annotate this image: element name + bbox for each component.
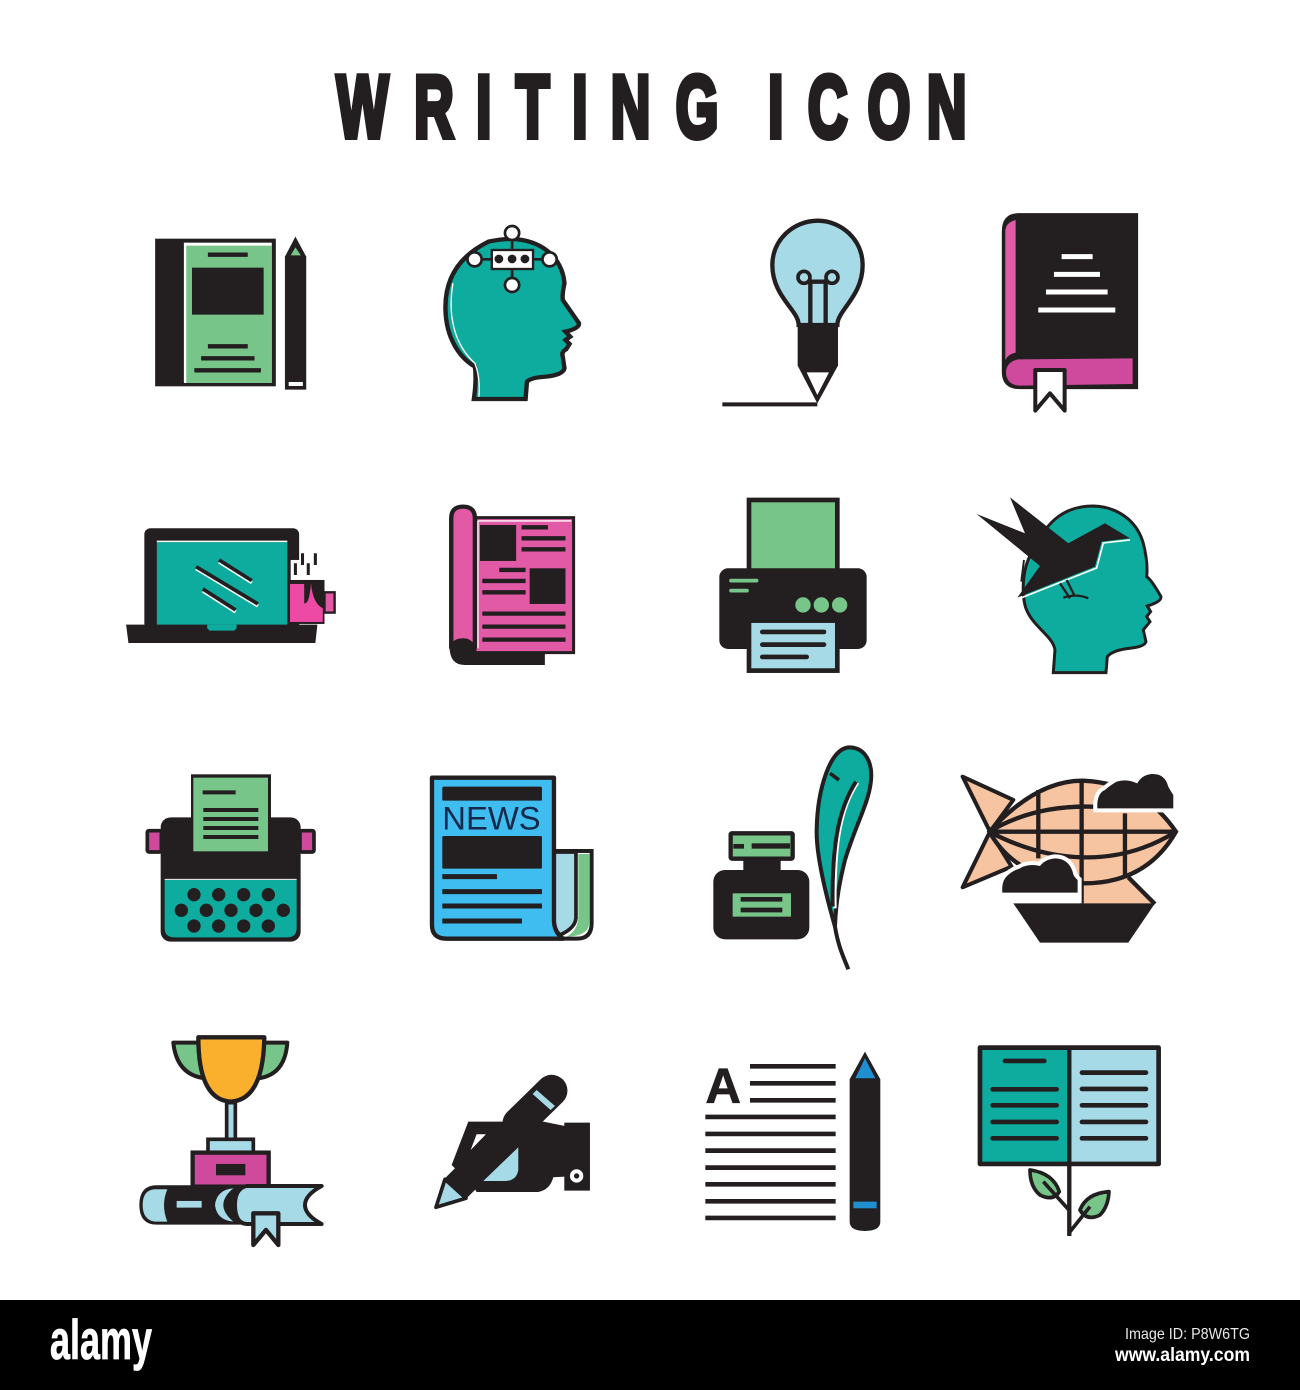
title: WRITING ICON	[337, 56, 967, 156]
icon: airship with clouds	[963, 774, 1176, 943]
icon: open book with plant	[980, 1048, 1159, 1236]
icon: notebook and pencil	[155, 237, 306, 390]
icon: hand writing with pen	[436, 1090, 590, 1207]
website: www.alamy.com	[1114, 1345, 1250, 1366]
icon: head with origami bird	[977, 497, 1161, 673]
icon: text document and pencil: A	[705, 1059, 741, 1114]
icon: trophy on books	[139, 1037, 322, 1245]
footer bar	[0, 1300, 1300, 1390]
footer logo: alamy	[50, 1308, 152, 1371]
icon: newspaper	[432, 778, 592, 939]
image id: Image ID: P8W6TG	[1125, 1326, 1250, 1343]
icon: typewriter	[147, 774, 314, 942]
icon: newspaper: NEWS	[442, 799, 541, 836]
icon: closed book with bookmark	[1003, 214, 1137, 411]
icon: light bulb pencil	[722, 221, 863, 404]
icon: inkwell and feather quill	[713, 747, 871, 969]
icon: printer	[719, 500, 867, 671]
icon: head with circuit diagram	[445, 226, 579, 399]
icon: text document and pencil	[705, 1052, 880, 1231]
icon: laptop and coffee mug	[126, 528, 335, 643]
icon: magazine scroll	[450, 507, 574, 665]
